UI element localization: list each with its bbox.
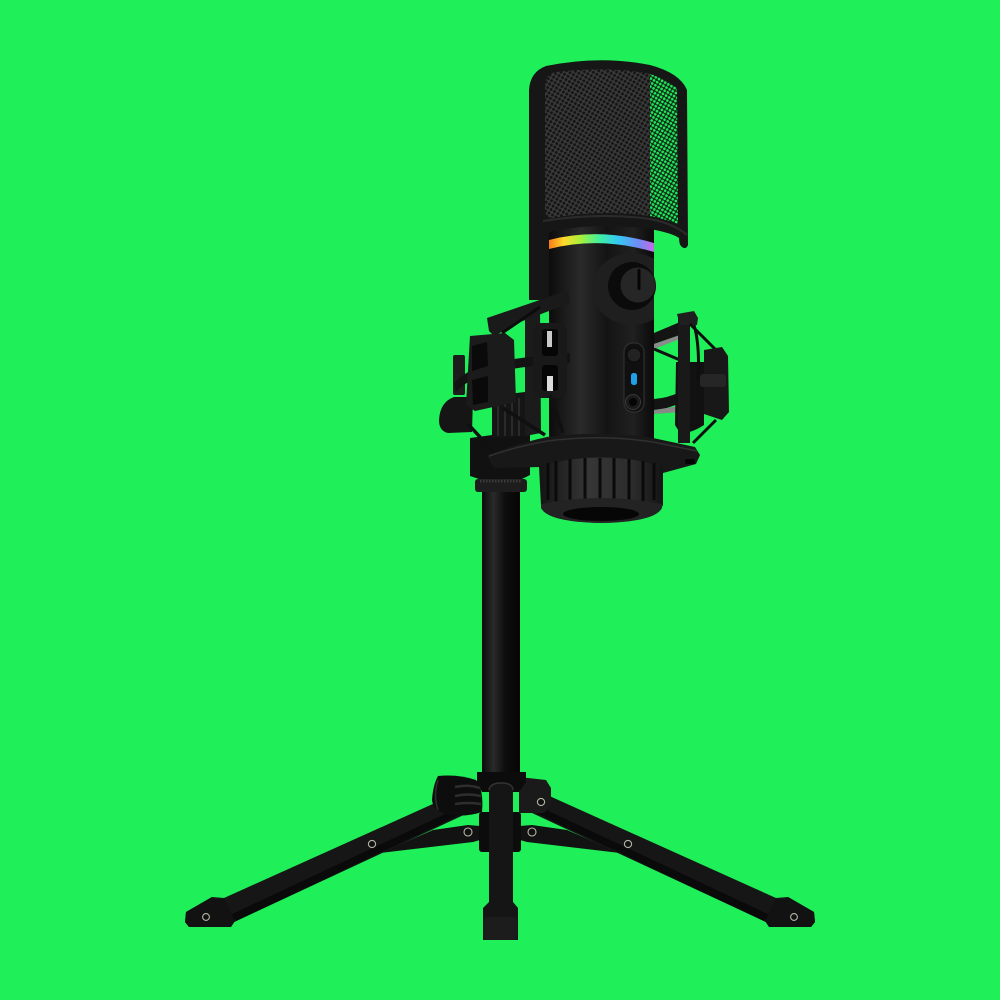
shock mount left side	[439, 292, 570, 450]
tripod locking knob	[432, 776, 482, 816]
lower struts	[468, 395, 563, 450]
threaded adapter ring	[539, 458, 663, 523]
struts	[690, 324, 716, 443]
stem collar	[475, 479, 527, 492]
pop filter	[529, 60, 688, 300]
see-through mesh section	[650, 74, 678, 224]
right leg brace	[520, 825, 620, 853]
centre leg	[483, 782, 518, 940]
vertical columns	[525, 308, 541, 436]
right tripod leg	[532, 794, 815, 927]
stem block below shock mount	[470, 430, 530, 480]
elastic link with silver clips	[533, 323, 567, 398]
pop filter frame	[529, 60, 688, 300]
clamp knob	[700, 374, 726, 387]
post	[678, 316, 690, 443]
rubber band	[454, 353, 570, 392]
tripod base	[185, 772, 815, 940]
mesh screen	[545, 69, 650, 218]
left tripod leg	[185, 794, 468, 927]
rear tab	[453, 355, 465, 395]
tripod stand pole	[482, 490, 520, 775]
top arm	[487, 292, 570, 336]
pop filter bottom band highlight	[543, 216, 687, 235]
centre lower hub	[479, 812, 521, 852]
left clamp cube	[466, 333, 516, 411]
microphone body	[549, 226, 656, 438]
lower left clamp knob	[439, 397, 473, 433]
right hub block	[519, 777, 551, 813]
RGB light ring	[549, 234, 654, 252]
ring opening	[563, 507, 639, 521]
control panel: headphone socket and status LED	[624, 343, 644, 412]
right clamp cube	[704, 347, 729, 420]
inner block	[675, 362, 704, 433]
gain knob	[608, 262, 656, 310]
post cap	[677, 311, 698, 325]
illustration: microphone on tripod on green background	[185, 60, 815, 940]
tripod screws	[203, 798, 797, 920]
tripod hub collar	[477, 772, 526, 792]
shock mount right side	[675, 311, 729, 443]
left leg brace	[380, 825, 480, 853]
bottom mount plate	[487, 434, 700, 473]
gain knob disc	[604, 254, 654, 324]
shock mount rear struts	[654, 322, 680, 414]
